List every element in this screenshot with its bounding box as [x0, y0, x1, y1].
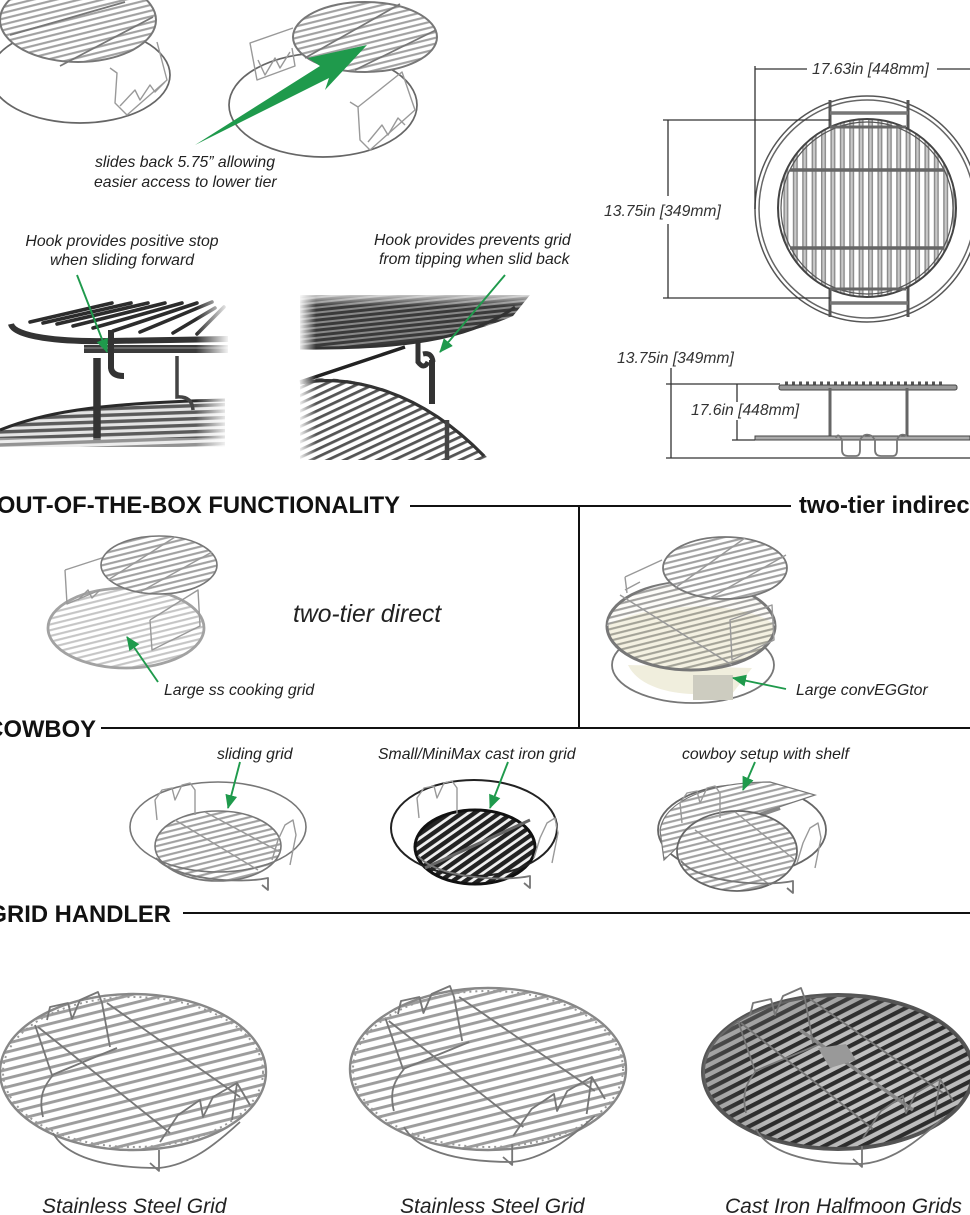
dimension: top width [755, 61, 970, 209]
dimension: left height [604, 120, 830, 298]
callout: cast iron grid: Small/MiniMax cast iron grid [378, 746, 577, 763]
caption: slides back: slides back 5.75” allowing [95, 154, 275, 171]
dimension: top width: 17.63in [448mm] [812, 61, 929, 78]
caption: slides back: easier access to lower tier [94, 174, 277, 191]
callout: cast iron grid [378, 746, 577, 808]
arrow: hook forward pointer [77, 275, 107, 352]
callout: large convEGGtor [733, 678, 928, 699]
photo: hook detail forward [0, 295, 230, 453]
callout: sliding grid [217, 746, 294, 808]
caption: positive stop hook: Hook provides positive stop [25, 233, 219, 250]
callout: sliding grid: sliding grid [217, 746, 294, 763]
caption: positive stop hook [25, 233, 219, 269]
dimension: side view [617, 350, 970, 458]
label: two-tier direct: two-tier direct [293, 601, 442, 628]
illustration: cowboy setup with shelf [658, 782, 826, 893]
illustration: stainless steel grid two [350, 986, 626, 1165]
photo: hook detail back [298, 290, 532, 462]
technical drawing: side view [755, 383, 970, 456]
caption: slides back [94, 154, 277, 191]
caption: tipping hook [374, 232, 572, 268]
dimension: side view: 13.75in [349mm] [617, 350, 734, 367]
illustration: grid slid forward [0, 0, 170, 123]
callout: large ss cooking grid [127, 637, 315, 699]
illustration: grid slid back [229, 2, 437, 157]
caption: tipping hook: Hook provides prevents grid [374, 232, 572, 249]
technical drawing: plan view [755, 96, 970, 322]
caption: tipping hook: from tipping when slid back [379, 251, 571, 268]
dimension: left height: 13.75in [349mm] [604, 203, 721, 220]
caption: positive stop hook: when sliding forward [50, 252, 195, 269]
divider: two-tier panels [578, 506, 580, 728]
dimension: side view: 17.6in [448mm] [691, 402, 800, 419]
illustration: cast iron grid [391, 780, 558, 888]
illustration: two-tier indirect [607, 537, 787, 703]
callout: cowboy setup: cowboy setup with shelf [682, 746, 850, 763]
callout: cowboy setup [682, 746, 850, 790]
illustration: cast iron halfmoon grids [703, 988, 970, 1167]
illustration: two-tier direct [48, 536, 217, 668]
callout: large convEGGtor: Large convEGGtor [796, 682, 928, 699]
illustration: stainless steel grid one [0, 992, 266, 1171]
heading: out-of-the-box functionality: OUT-OF-THE-BOX FUNCTIONALITY [0, 492, 400, 519]
arrow: green slide direction [195, 45, 367, 145]
arrow: hook back pointer [440, 275, 505, 352]
illustration: sliding grid [130, 782, 306, 890]
callout: large ss cooking grid: Large ss cooking grid [164, 682, 315, 699]
